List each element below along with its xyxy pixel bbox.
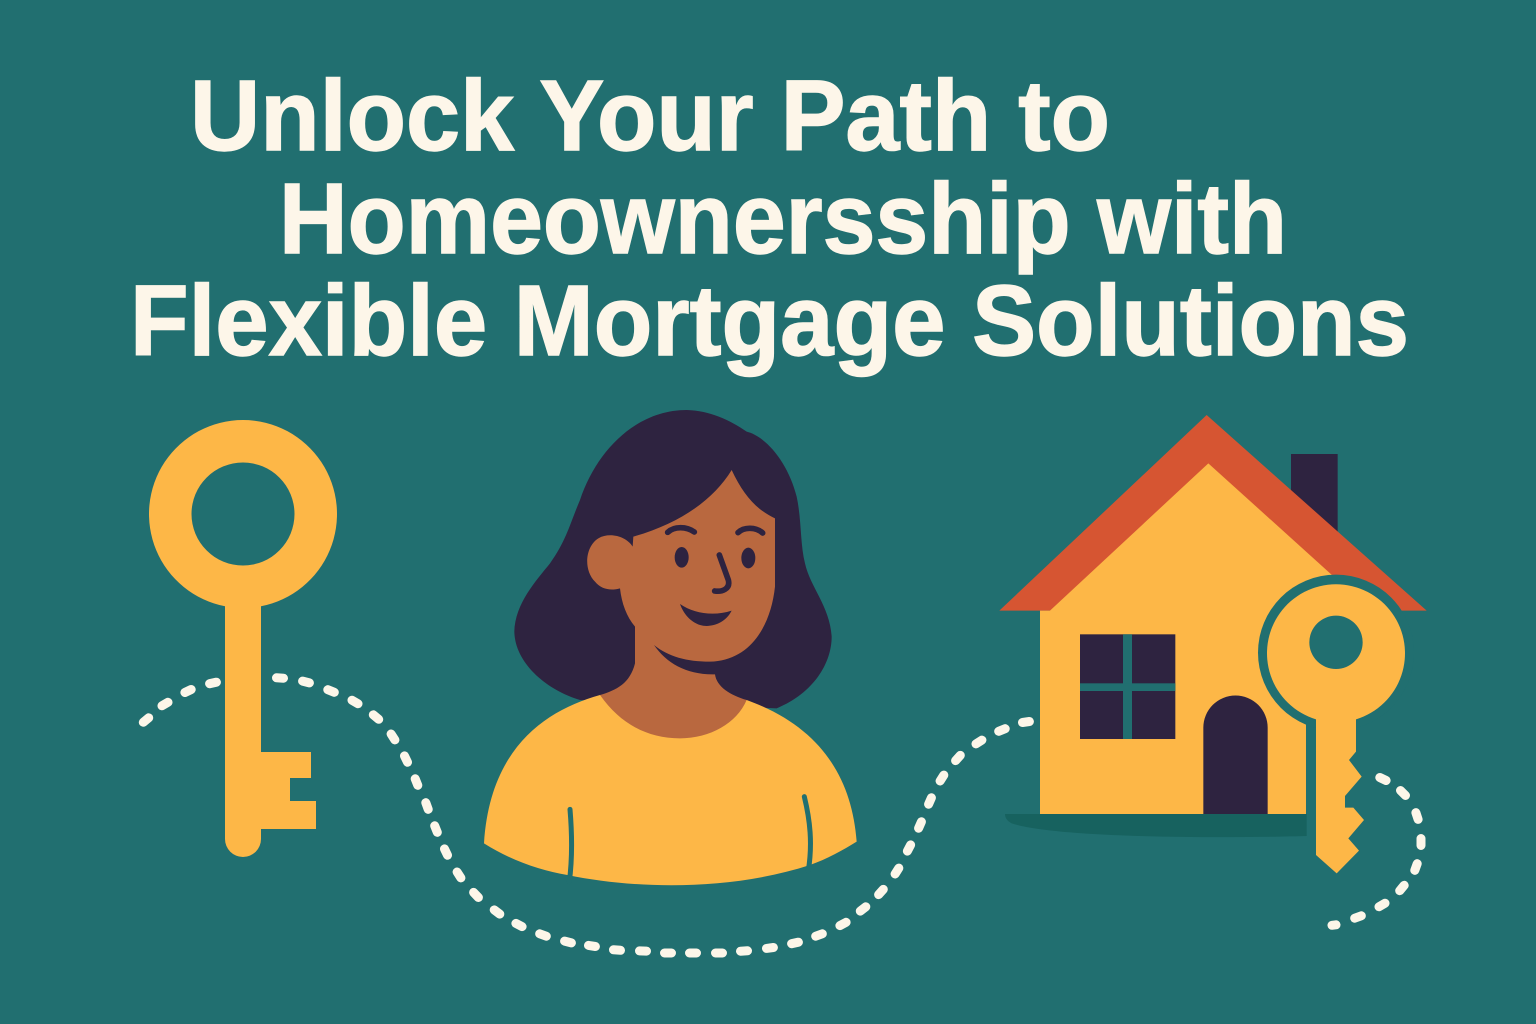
door [1203,695,1268,814]
smile [680,604,732,626]
house illustration [999,415,1427,873]
eyebrows and nose [668,528,763,591]
hair [514,410,832,708]
title line 1: Unlock Your Path to [190,60,1110,172]
face and neck [587,470,775,738]
title [130,60,1409,377]
shirt sleeve creases [569,797,810,882]
icon: large key [149,420,337,857]
woman illustration [484,410,857,885]
shirt [484,695,857,885]
icon: house key [1267,584,1405,873]
key halo [1258,575,1414,731]
chimney [1291,454,1338,537]
window [1080,634,1175,739]
dotted path: right of house key [1332,778,1421,925]
dotted path: left key to house [143,678,1029,953]
eyes [675,547,755,568]
house body [1040,463,1357,814]
title line 3: Flexible Mortgage Solutions [130,265,1409,377]
roof [999,415,1427,611]
title line 2: Homeownersship with [279,163,1287,275]
ground shadow [1005,814,1307,837]
